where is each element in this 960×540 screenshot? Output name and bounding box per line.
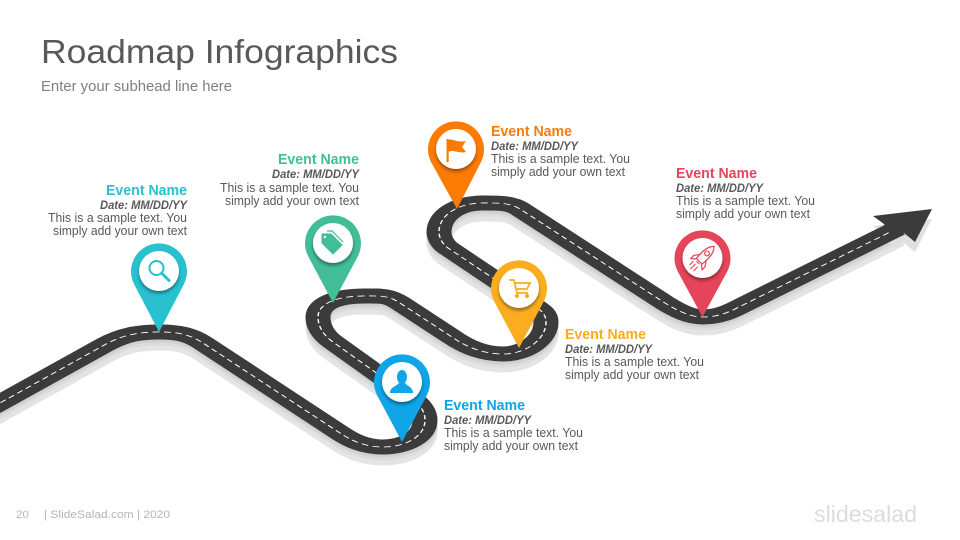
event: cart: simply add your own text	[565, 368, 700, 382]
event: rocket: simply add your own text	[676, 207, 811, 221]
icon: person	[390, 370, 413, 393]
pin: rocket	[674, 230, 730, 317]
event: tag: Event Name	[278, 152, 359, 168]
event: search: This is a sample text. You	[48, 211, 187, 225]
pin: flag	[428, 121, 484, 209]
event: person: simply add your own text	[444, 439, 579, 453]
event: rocket	[676, 166, 815, 221]
event: tag: simply add your own text	[225, 194, 360, 208]
event: search: Date: MM/DD/YY	[100, 198, 188, 212]
event: flag: This is a sample text. You	[491, 152, 630, 166]
event: rocket: Date: MM/DD/YY	[676, 181, 764, 195]
event: flag: simply add your own text	[491, 165, 626, 179]
event: search: simply add your own text	[53, 224, 188, 238]
event: person: Date: MM/DD/YY	[444, 413, 532, 427]
event: cart	[565, 327, 704, 382]
event: flag: Date: MM/DD/YY	[491, 139, 579, 153]
event: person: This is a sample text. You	[444, 426, 583, 440]
icon: rocket	[690, 241, 720, 271]
footer: logo wordmark: slidesalad	[814, 501, 917, 527]
subtitle: Enter your subhead line here	[41, 79, 232, 95]
event: cart: Event Name	[565, 327, 646, 343]
event: rocket: This is a sample text. You	[676, 194, 815, 208]
road shadow	[0, 206, 932, 458]
event: cart: Date: MM/DD/YY	[565, 342, 653, 356]
icon: magnifier	[150, 261, 169, 280]
title: Roadmap Infographics	[41, 33, 398, 70]
event: search	[48, 183, 188, 238]
event: flag: Event Name	[491, 124, 572, 140]
event: person: Event Name	[444, 398, 525, 414]
icon: flag	[446, 139, 466, 162]
footer: site and year: | SlideSalad.com | 2020	[44, 509, 170, 521]
event: flag	[491, 124, 630, 179]
event: rocket: Event Name	[676, 166, 757, 182]
event: tag	[220, 152, 360, 208]
event: cart: This is a sample text. You	[565, 355, 704, 369]
footer: page number: 20	[16, 509, 29, 521]
pin: person	[374, 354, 430, 442]
icon: shopping cart	[509, 280, 530, 297]
pin: search	[131, 243, 187, 332]
pin: tag	[305, 215, 361, 303]
winding road with arrow	[0, 203, 932, 447]
event: person	[444, 398, 583, 453]
pin: cart	[491, 260, 547, 348]
event: tag: This is a sample text. You	[220, 181, 359, 195]
icon: price tag	[322, 231, 343, 254]
event: search: Event Name	[106, 183, 187, 199]
event: tag: Date: MM/DD/YY	[272, 167, 360, 181]
